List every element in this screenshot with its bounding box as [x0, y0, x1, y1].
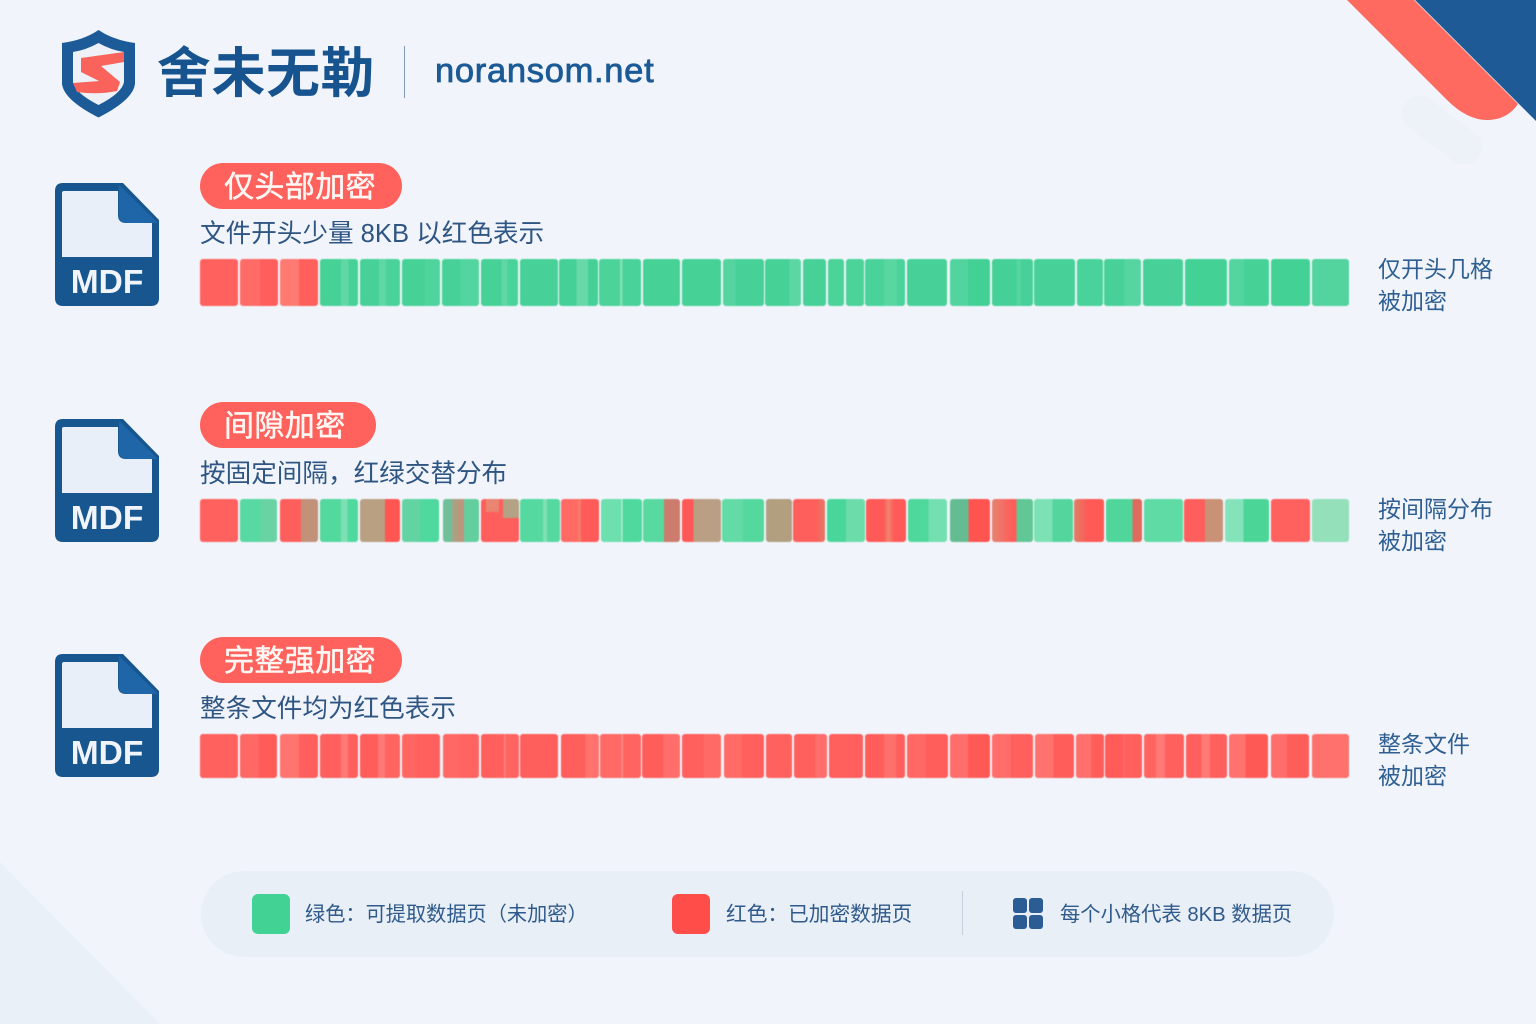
side note: 整条文件 [1378, 731, 1470, 757]
side note: 被加密 [1378, 288, 1447, 314]
brand name: 舍未无勒 [157, 44, 375, 104]
legend: green label: 绿色：可提取数据页（未加密） [305, 904, 588, 926]
badge: 间隙加密: 间隙加密 [224, 410, 346, 443]
panel: full encryption [55, 637, 1470, 789]
side note: 按间隔分布 [1378, 496, 1493, 522]
icon: grid of four squares [1013, 898, 1043, 929]
icon: MDF file: MDF [71, 264, 143, 301]
icon: MDF file: MDF [71, 735, 143, 772]
side note: 被加密 [1378, 528, 1447, 554]
legend: green swatch [252, 894, 290, 934]
badge: 间隙加密 [200, 402, 376, 448]
icon: MDF file [55, 183, 159, 306]
legend bar [201, 871, 1334, 957]
website address: noransom.net [435, 52, 654, 90]
logo header [62, 30, 654, 118]
description: 文件开头少量 8KB 以红色表示 [200, 220, 544, 248]
description: 整条文件均为红色表示 [200, 695, 456, 723]
side note: 被加密 [1378, 763, 1447, 789]
badge: 完整强加密: 完整强加密 [224, 645, 376, 678]
badge: 仅头部加密: 仅头部加密 [224, 171, 376, 204]
icon: MDF file [55, 654, 159, 777]
legend: page size label: 每个小格代表 8KB 数据页 [1060, 904, 1292, 926]
legend: divider [962, 891, 963, 935]
legend: red label: 红色：已加密数据页 [726, 903, 912, 926]
badge: 仅头部加密 [200, 163, 402, 209]
icon: MDF file: MDF [71, 500, 143, 537]
badge: 完整强加密 [200, 637, 402, 683]
bar: alternating red and green pages [199, 498, 1350, 543]
side note [1378, 496, 1493, 554]
side note [1378, 256, 1493, 314]
icon: MDF file [55, 419, 159, 542]
panel: header-only encryption [55, 163, 1493, 314]
bar: mostly green pages, first three red [199, 258, 1350, 307]
side note: 仅开头几格 [1378, 256, 1493, 282]
divider line [404, 46, 405, 98]
bar: all red pages [199, 733, 1350, 779]
legend: red swatch [672, 894, 710, 934]
side note [1378, 731, 1470, 789]
icon: shield logo [62, 30, 135, 118]
description: 按固定间隔，红绿交替分布 [200, 460, 507, 488]
panel: interval encryption [55, 402, 1493, 554]
